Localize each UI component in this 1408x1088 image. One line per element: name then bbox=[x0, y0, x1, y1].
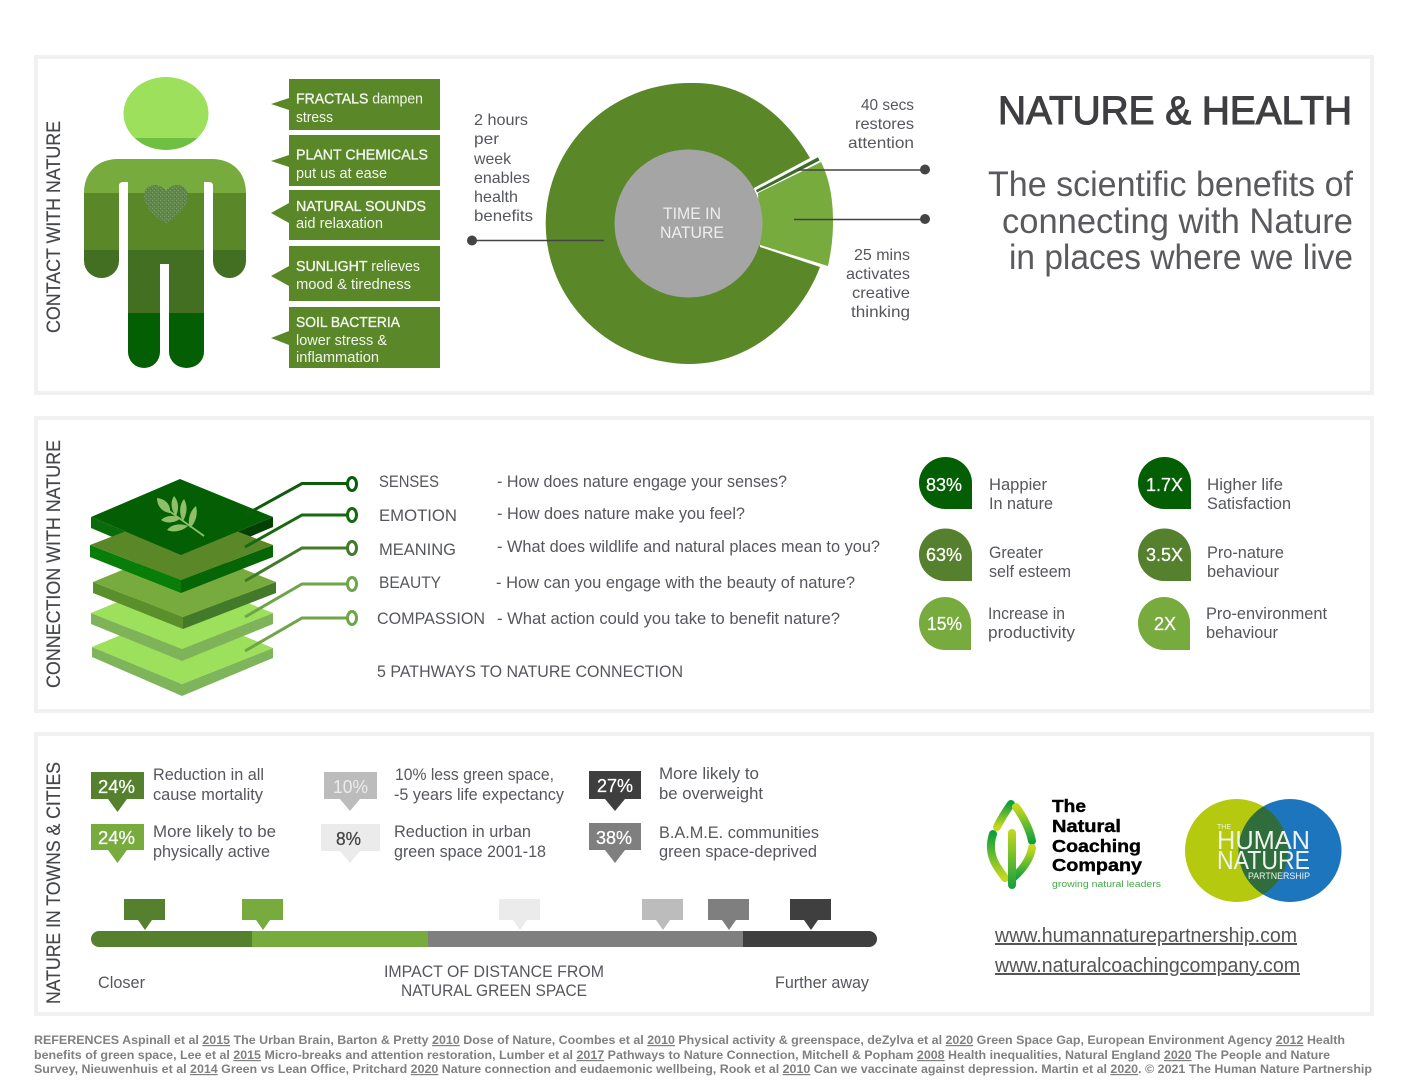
stat: 15% bbox=[919, 597, 1076, 650]
stat: 83%: 83% bbox=[926, 474, 962, 495]
logo: human nature partnership bbox=[1185, 799, 1342, 902]
callout: sunlight bbox=[271, 246, 440, 301]
callout: soil bacteria: lower stress & bbox=[296, 333, 387, 349]
logo: natural coaching company: growing natural leaders bbox=[1052, 879, 1162, 889]
annotation: 2 hours: benefits bbox=[474, 208, 533, 225]
references: REFERENCES Aspinall et al 2015 The Urban Brain, Barton & Pretty 2010 Dose of Nature, Coombes et al 2010 Physical activity & greenspace, deZylva et al 2020 Green Space Gap, European Environment Agency 2012 Health bbox=[34, 1033, 1345, 1047]
references: Survey, Nieuwenhuis et al 2014 Green vs Lean Office, Pritchard 2020 Nature connection and eudaemonic wellbeing, Rook et al 2010 Can we vaccinate against depression. Martin et al 2020. © 2021 The Human Nature Partnership bbox=[34, 1062, 1372, 1076]
callout: sunlight: SUNLIGHT relieves bbox=[296, 259, 420, 275]
callout: plant chemicals: PLANT CHEMICALS bbox=[296, 148, 428, 164]
stat: 1.7X: 1.7X bbox=[1146, 474, 1183, 495]
subtitle bbox=[988, 165, 1353, 277]
pathway list: - What action could you take to benefit nature? bbox=[497, 610, 840, 628]
pathway list: BEAUTY bbox=[379, 574, 441, 592]
annotation: 2 hours bbox=[467, 112, 604, 246]
section label: connection with nature: CONNECTION WITH NATURE bbox=[43, 440, 65, 688]
website links bbox=[994, 925, 1300, 977]
title: NATURE & HEALTH bbox=[998, 89, 1352, 133]
stat: 3.5X: Pro-nature bbox=[1207, 544, 1284, 562]
annotation: 40 secs: attention bbox=[848, 135, 914, 152]
connector: beauty bbox=[245, 578, 356, 617]
stat: 83%: In nature bbox=[989, 495, 1053, 513]
subtitle: connecting with Nature bbox=[1002, 202, 1353, 241]
subtitle: in places where we live bbox=[1009, 238, 1353, 277]
section label: nature in towns and cities: NATURE IN TOWNS & CITIES bbox=[43, 762, 65, 1004]
annotation: 2 hours: health bbox=[474, 189, 518, 206]
distance scale bar bbox=[91, 899, 877, 947]
stat tag: 24% mortality bbox=[91, 766, 264, 812]
chart: time in nature donut bbox=[546, 83, 833, 364]
stat: 15%: Increase in bbox=[988, 605, 1065, 623]
stat: 2X: 2X bbox=[1154, 613, 1176, 634]
stat tag: 38%: green space-deprived bbox=[659, 843, 817, 861]
scale label: impact of distance: IMPACT OF DISTANCE FROM bbox=[384, 963, 604, 981]
stat tag: 38%: 38% bbox=[596, 827, 632, 848]
logo: human nature partnership: NATURE bbox=[1217, 845, 1310, 875]
stat: 63% bbox=[919, 528, 1071, 581]
stat tag: 24% active bbox=[91, 823, 276, 863]
section label: contact with nature: CONTACT WITH NATURE bbox=[43, 121, 65, 333]
stat tag: 8%: Reduction in urban bbox=[394, 823, 531, 841]
annotation: 2 hours: week bbox=[473, 151, 512, 168]
references bbox=[34, 1033, 1372, 1076]
annotation: 25 mins: thinking bbox=[851, 304, 910, 321]
website links: www.humannaturepartnership.com bbox=[994, 925, 1297, 947]
pathway list bbox=[377, 473, 880, 628]
callout: fractals: FRACTALS dampen bbox=[296, 92, 423, 108]
logo: natural coaching company: The bbox=[1052, 796, 1086, 816]
annotation: 40 secs bbox=[798, 97, 930, 174]
stat: 3.5X: 3.5X bbox=[1146, 544, 1183, 565]
callout: natural sounds bbox=[271, 190, 440, 240]
annotation: 2 hours: enables bbox=[474, 170, 530, 187]
stat: 15%: productivity bbox=[988, 624, 1076, 642]
stat tag: 27%: 27% bbox=[597, 775, 633, 796]
annotation: 25 mins: creative bbox=[852, 285, 910, 302]
references: benefits of green space, Lee et al 2015 Micro-breaks and attention restoration, Lumber et al 2017 Pathways to Nature Connection, Mitchell & Popham 2008 Health inequalities, Natural England 2020 The People and Nature bbox=[34, 1048, 1330, 1062]
logo: natural coaching company: Coaching bbox=[1052, 836, 1141, 856]
stat tag: 8%: 8% bbox=[336, 828, 361, 849]
stat: 1.7X: Higher life bbox=[1207, 476, 1283, 494]
stat tag: 24% active: physically active bbox=[153, 843, 270, 861]
scale label: impact of distance: NATURAL GREEN SPACE bbox=[401, 982, 587, 1000]
stat: 63%: Greater bbox=[989, 544, 1043, 562]
stat: 3.5X: behaviour bbox=[1207, 563, 1279, 581]
stat tag: 10%: 10% bbox=[333, 776, 368, 797]
callout: natural sounds: NATURAL SOUNDS bbox=[296, 199, 426, 215]
panel: connection with nature bbox=[36, 418, 1372, 711]
icon: leaf sprig bbox=[157, 496, 204, 536]
stat: 83%: Happier bbox=[989, 476, 1047, 494]
connector: senses bbox=[245, 478, 356, 515]
stat: 2X: Pro-environment bbox=[1206, 605, 1327, 623]
stat tag: 10% bbox=[324, 766, 565, 811]
callout: plant chemicals: put us at ease bbox=[296, 166, 387, 182]
logo: human nature partnership: PARTNERSHIP bbox=[1248, 871, 1310, 881]
logo: natural coaching company bbox=[991, 796, 1162, 889]
stat: 83% bbox=[919, 457, 1053, 513]
stat tag: 24% mortality: cause mortality bbox=[153, 786, 264, 804]
annotation: 2 hours: per bbox=[474, 131, 500, 148]
pathway list: SENSES bbox=[379, 473, 439, 491]
stat: 3.5X bbox=[1138, 528, 1284, 581]
stat tag: 24% mortality: Reduction in all bbox=[153, 766, 264, 784]
callout: fractals bbox=[271, 79, 440, 130]
diagram: stacked layers bbox=[90, 479, 276, 696]
stat tag: 27% bbox=[589, 765, 763, 811]
panel: contact with nature bbox=[36, 57, 1372, 393]
website links: www.naturalcoachingcompany.com bbox=[994, 955, 1300, 977]
connector: meaning bbox=[245, 542, 356, 581]
subtitle: The scientific benefits of bbox=[988, 165, 1353, 204]
scale label: closer: Closer bbox=[98, 974, 145, 992]
callout: natural sounds: aid relaxation bbox=[296, 216, 383, 232]
icon: human figure bbox=[80, 70, 250, 373]
logo: human nature partnership: HUMAN bbox=[1217, 825, 1310, 855]
pathway list: EMOTION bbox=[379, 507, 457, 525]
stat: 63%: self esteem bbox=[989, 563, 1071, 581]
pathway list: - How does nature engage your senses? bbox=[497, 473, 787, 491]
annotation: 2 hours: 2 hours bbox=[474, 112, 528, 129]
stat: 1.7X bbox=[1138, 457, 1291, 513]
stat: 15%: 15% bbox=[927, 613, 962, 634]
stat tag: 8%: green space 2001-18 bbox=[394, 843, 546, 861]
stat tag: 27%: be overweight bbox=[659, 785, 763, 803]
annotation: 25 mins bbox=[794, 214, 930, 321]
connector: compassion bbox=[245, 612, 356, 651]
scale label: further away: Further away bbox=[775, 974, 870, 992]
annotation: 40 secs: restores bbox=[855, 116, 914, 133]
callout: soil bacteria bbox=[271, 307, 440, 368]
stat tag: 24% active: 24% bbox=[98, 827, 135, 848]
annotation: 40 secs: 40 secs bbox=[861, 97, 914, 114]
connector: emotion bbox=[245, 508, 356, 547]
pathway list: MEANING bbox=[379, 541, 456, 559]
stat: 2X: behaviour bbox=[1206, 624, 1278, 642]
chart: time in nature donut: NATURE bbox=[660, 224, 724, 242]
callout: fractals: stress bbox=[296, 110, 333, 126]
stat tag: 10%: 10% less green space, bbox=[395, 766, 554, 784]
callout: soil bacteria: SOIL BACTERIA bbox=[296, 315, 400, 331]
scale label: impact of distance bbox=[384, 963, 604, 1000]
stat: 63%: 63% bbox=[926, 544, 962, 565]
stat tag: 8% bbox=[321, 823, 546, 863]
stat: 2X bbox=[1138, 597, 1327, 650]
callout: plant chemicals bbox=[271, 135, 440, 186]
stat tag: 38% bbox=[589, 823, 819, 863]
caption: 5 pathways: 5 PATHWAYS TO NATURE CONNECTION bbox=[377, 663, 683, 681]
stat: 1.7X: Satisfaction bbox=[1207, 495, 1291, 513]
pathway list: COMPASSION bbox=[377, 610, 485, 628]
stat tag: 24% mortality: 24% bbox=[98, 776, 135, 797]
pathway list: - How can you engage with the beauty of nature? bbox=[496, 574, 855, 592]
stat tag: 38%: B.A.M.E. communities bbox=[659, 824, 819, 842]
stat tag: 10%: -5 years life expectancy bbox=[394, 786, 565, 804]
annotation: 25 mins: 25 mins bbox=[854, 247, 910, 264]
logo: natural coaching company: Natural bbox=[1052, 816, 1121, 836]
callout: soil bacteria: inflammation bbox=[296, 350, 379, 366]
logo: natural coaching company: Company bbox=[1052, 855, 1142, 875]
panel: nature in towns and cities bbox=[36, 734, 1372, 1014]
pathway list: - What does wildlife and natural places mean to you? bbox=[497, 538, 880, 556]
markers on scale bbox=[124, 899, 831, 930]
annotation: 25 mins: activates bbox=[846, 266, 910, 283]
callout: sunlight: mood & tiredness bbox=[296, 277, 411, 293]
chart: time in nature donut: TIME IN bbox=[663, 205, 721, 223]
stat tag: 27%: More likely to bbox=[659, 765, 759, 783]
logo: human nature partnership: THE bbox=[1217, 824, 1231, 831]
pathway list: - How does nature make you feel? bbox=[497, 505, 745, 523]
stat tag: 24% active: More likely to be bbox=[153, 823, 276, 841]
